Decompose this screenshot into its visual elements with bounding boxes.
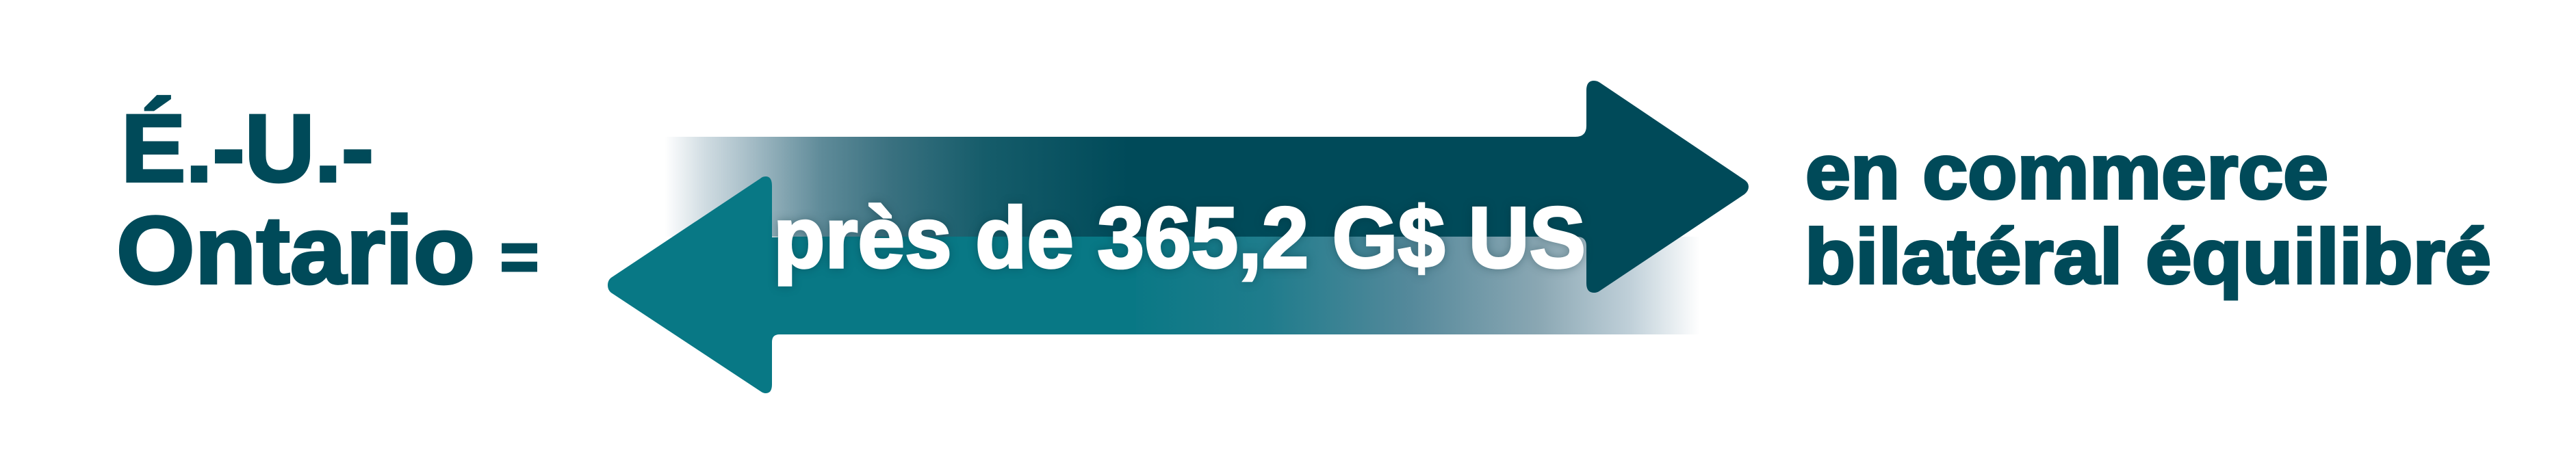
right description text [1805,129,2491,300]
heading: É.-U.-Ontario = [116,94,539,304]
description line 2: bilatéral équilibré [1805,213,2491,300]
heading line 2: Ontario [116,196,475,304]
double arrow graphic [608,81,1749,393]
description line 1: en commerce [1805,129,2328,215]
arrow: teal head, pointing left [608,176,1136,393]
heading line 1: É.-U.- [121,94,374,202]
equals sign: = [500,219,539,295]
arrow: dark, pointing right [665,81,1749,293]
arrow shaft: teal, fading to the right [772,237,1700,334]
central value label: près de 365,2 G$ US [773,189,1586,286]
